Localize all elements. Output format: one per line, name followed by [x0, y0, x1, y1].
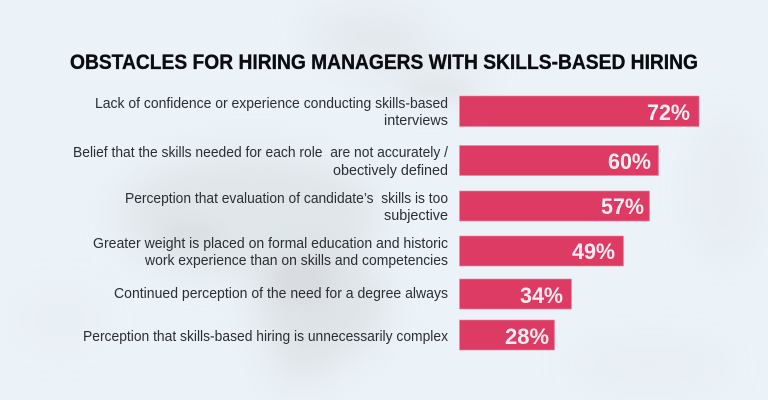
row: need for a degree 34%: 34% [520, 283, 563, 308]
row: evaluation too subjective 57%: 57% [601, 194, 644, 219]
row: formal education weight 49%: Greater weight is placed on formal education and historic [93, 235, 448, 252]
row: lack of confidence 72%: 72% [647, 100, 690, 125]
row: belief skills not defined 60% [73, 144, 658, 179]
row: need for a degree 34%: Continued perception of the need for a degree always [114, 285, 448, 302]
row: lack of confidence 72%: interviews [384, 112, 448, 129]
row: belief skills not defined 60%: Belief that the skills needed for each role are not accurately / [73, 144, 449, 161]
row: unnecessarily complex 28%: 28% [505, 324, 549, 349]
title: OBSTACLES FOR HIRING MANAGERS WITH SKILLS-BASED HIRING [70, 51, 698, 74]
row: belief skills not defined 60%: obectively defined [333, 162, 448, 179]
row: unnecessarily complex 28% [83, 320, 554, 350]
row: evaluation too subjective 57% [125, 190, 650, 224]
row: formal education weight 49%: work experience than on skills and competencies [144, 252, 448, 269]
row: unnecessarily complex 28%: Perception that skills-based hiring is unnecessarily complex [83, 328, 448, 345]
row: need for a degree 34% [114, 279, 572, 309]
bar chart [73, 95, 699, 350]
row: evaluation too subjective 57%: Perception that evaluation of candidate’s skills is too [125, 190, 448, 207]
row: lack of confidence 72%: Lack of confidence or experience conducting skills-based [95, 95, 448, 112]
row: formal education weight 49%: 49% [572, 239, 615, 264]
row: lack of confidence 72% [95, 95, 699, 129]
row: evaluation too subjective 57%: subjective [384, 207, 448, 224]
row: belief skills not defined 60%: 60% [608, 149, 651, 174]
row: formal education weight 49% [93, 235, 624, 269]
